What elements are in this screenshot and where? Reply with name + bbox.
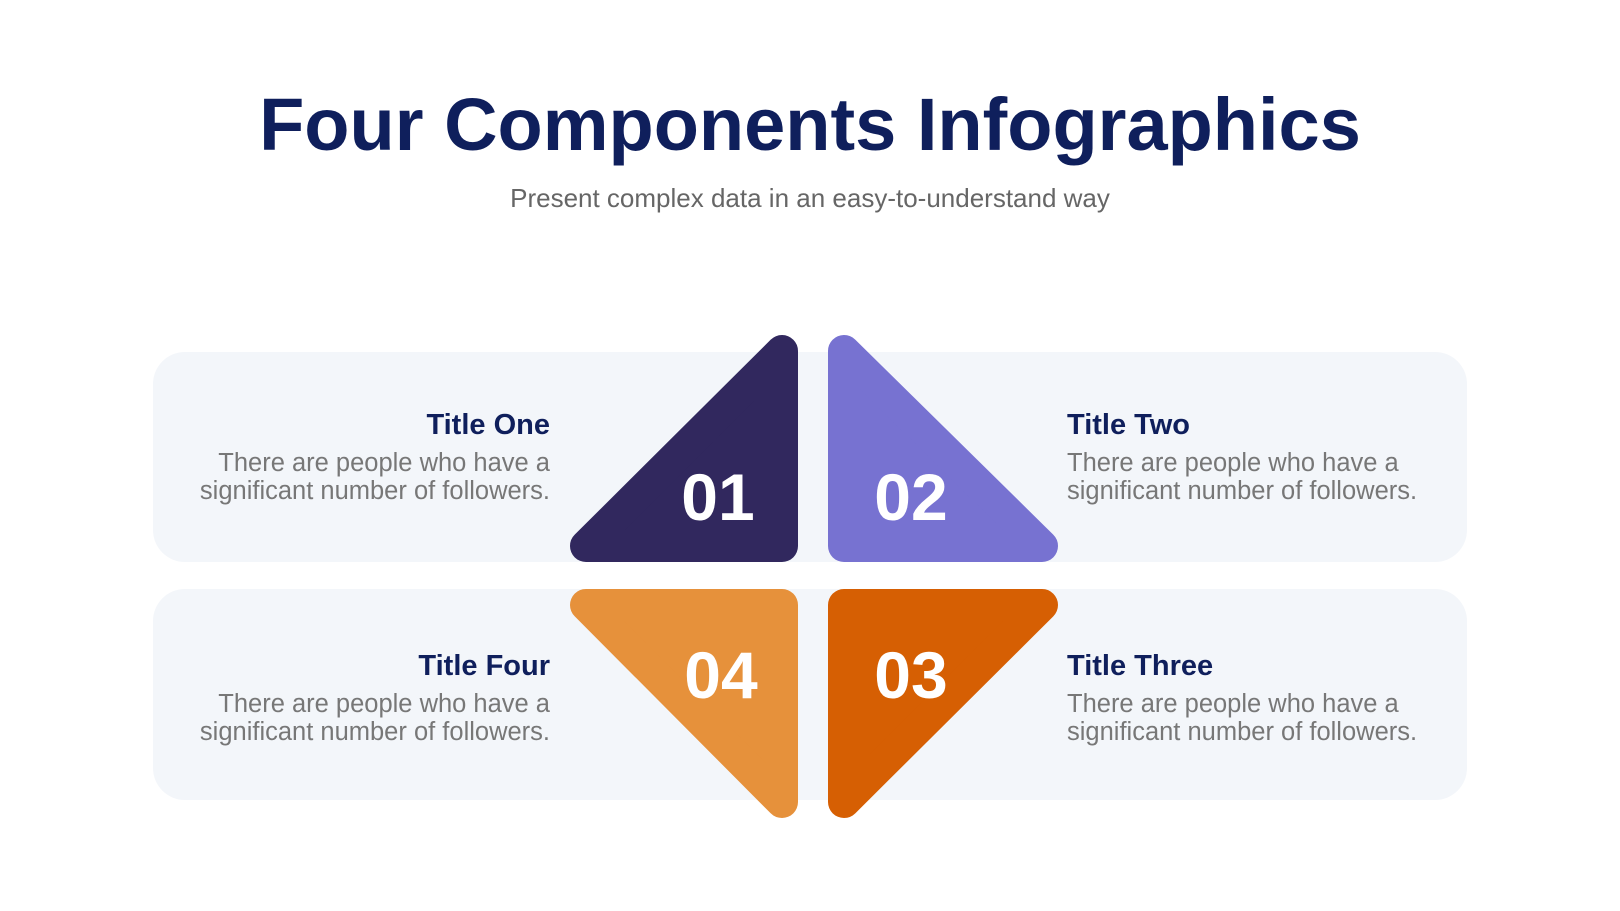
- triangle 04: [586, 605, 782, 802]
- triangle 02: [844, 351, 1042, 546]
- text: title three: Title Three: [1067, 650, 1213, 682]
- text: body two: [1067, 449, 1417, 505]
- text: body four: significant number of followers.: [200, 718, 550, 746]
- text: title two: Title Two: [1067, 409, 1190, 441]
- text: title four: Title Four: [418, 650, 550, 682]
- text: body four: [200, 690, 550, 746]
- triangle 01: [586, 351, 782, 546]
- triangle 03: 03: [874, 638, 948, 712]
- text: body one: significant number of followers.: [200, 477, 550, 505]
- text: body three: There are people who have a: [1067, 690, 1399, 718]
- triangle 02: 02: [874, 460, 948, 534]
- text: body four: There are people who have a: [218, 690, 550, 718]
- title: Four Components Infographics: [259, 83, 1361, 166]
- text: body three: [1067, 690, 1417, 746]
- triangle 01: 01: [681, 460, 755, 534]
- text: body one: [200, 449, 550, 505]
- text: body three: significant number of followers.: [1067, 718, 1417, 746]
- triangle 03: [844, 605, 1042, 802]
- triangle 04: 04: [684, 638, 758, 712]
- panel: bottom row: [153, 589, 1467, 800]
- text: body two: There are people who have a: [1067, 449, 1399, 477]
- text: body two: significant number of followers.: [1067, 477, 1417, 505]
- text: title one: Title One: [426, 409, 550, 441]
- panel: top row: [153, 352, 1467, 562]
- text: body one: There are people who have a: [218, 449, 550, 477]
- subtitle: Present complex data in an easy-to-understand way: [510, 183, 1110, 213]
